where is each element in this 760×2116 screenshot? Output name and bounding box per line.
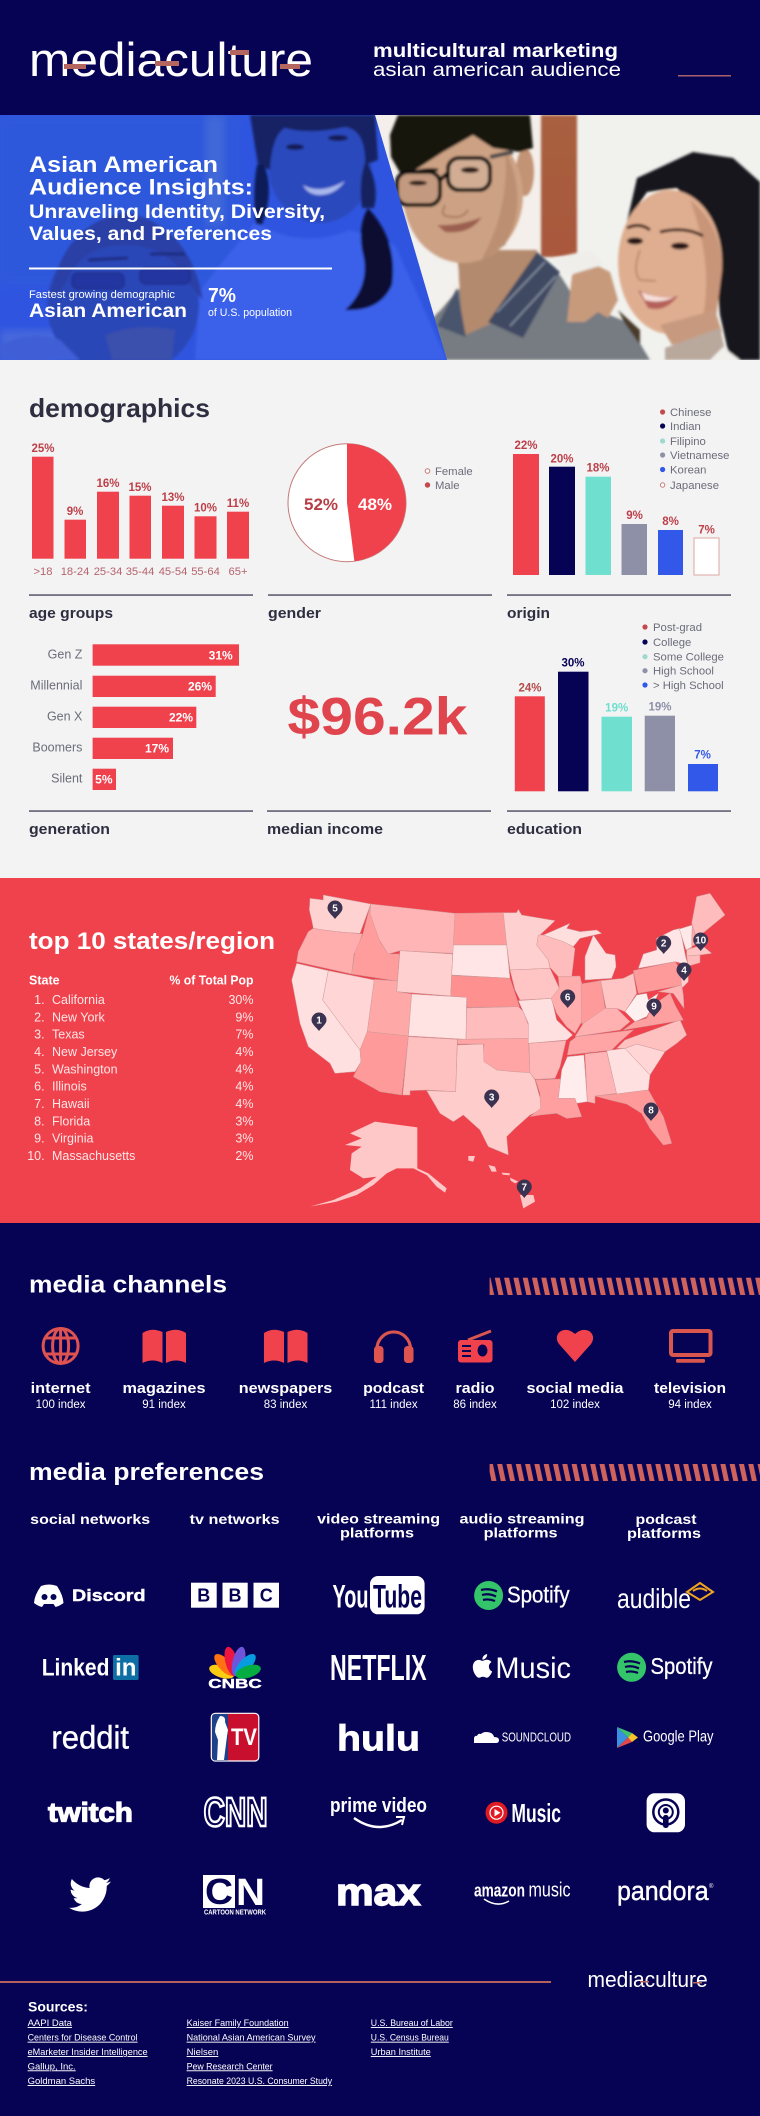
hero stat: fastest growing demographic (29, 289, 187, 322)
table: states ranking: State (29, 974, 60, 988)
heading: media preferences: media preferences (29, 1459, 264, 1486)
logo: CNN: CNN (204, 1789, 268, 1835)
heading: media channels: media channels (29, 1272, 227, 1299)
chart: origin (513, 407, 729, 575)
pin 5 Washington (328, 901, 342, 919)
chart: education: 7% (694, 750, 711, 762)
icon: television (671, 1331, 710, 1363)
table: states ranking: 10. (27, 1149, 45, 1163)
table: states ranking: 9. (34, 1132, 45, 1146)
chart: generation: 22% (169, 710, 193, 724)
chart: generation: Gen Z (48, 648, 83, 662)
logo: max: max (336, 1872, 421, 1914)
sources: Sources: (28, 1999, 88, 2015)
pin 10 Massachusetts (693, 933, 708, 951)
logo: CNBC (207, 1645, 263, 1691)
logo: footer mediaculture: mediaculture (588, 1967, 708, 1992)
icon: magazines book (142, 1330, 186, 1363)
table: states ranking: 4% (235, 1097, 254, 1111)
hero headline: Audience Insights: (29, 174, 253, 200)
column headers: media preferences: podcast (636, 1512, 697, 1527)
sources: Kaiser Family Foundation (187, 2018, 289, 2029)
chart: gender pie: 48% (358, 495, 392, 514)
chart: origin: 18% (586, 463, 610, 475)
channel: radio: radio (456, 1381, 495, 1397)
panel: media channels (0, 1223, 760, 2116)
legend: education (642, 622, 724, 692)
sources: AAPI Data (28, 2018, 73, 2029)
sources: Pew Research Center (187, 2061, 273, 2072)
sources: U.S. Census Bureau (371, 2033, 449, 2044)
chart: age groups: 65+ (229, 566, 247, 578)
logo: spotify audio: Spotify (507, 1582, 570, 1608)
column headers: media preferences: tv networks (190, 1512, 280, 1527)
legend: origin: Indian (670, 421, 701, 433)
legend: education: High School (653, 666, 714, 678)
pin 10 Massachusetts: 10 (695, 936, 707, 946)
table: states ranking: Florida (52, 1114, 90, 1128)
table: states ranking: Massachusetts (52, 1149, 135, 1163)
sources: eMarketer Insider Intelligence (28, 2047, 148, 2058)
column headers: media preferences: platforms (340, 1525, 414, 1540)
chart: origin: 20% (550, 454, 574, 466)
channel: television (654, 1381, 726, 1411)
sources: U.S. Bureau of Labor (371, 2018, 453, 2029)
logo: LinkedIn: in (115, 1654, 136, 1682)
column headers: media preferences: platforms (484, 1526, 558, 1541)
column headers: media preferences: social networks (30, 1512, 150, 1527)
table: states ranking: Virginia (52, 1132, 94, 1146)
logo: YouTube Music (486, 1798, 561, 1828)
chart: generation: Millennial (30, 678, 82, 692)
sources (28, 1999, 453, 2087)
logo: SoundCloud: SOUNDCLOUD (502, 1730, 571, 1745)
pin 6 Illinois: 6 (565, 992, 571, 1004)
channel: magazines (122, 1381, 206, 1411)
table: states ranking: % of Total Pop (170, 974, 254, 988)
legend: education: > High School (653, 680, 724, 692)
channel: podcast: 111 index (370, 1399, 418, 1411)
pin 8 Florida (644, 1103, 658, 1121)
logo: Twitter (69, 1877, 111, 1912)
chart: age groups: 55-64 (191, 566, 220, 578)
logo: reddit: reddit (51, 1719, 129, 1755)
hero stat: 7% of U.S. population (208, 285, 292, 319)
stat: median income: $96.2k (288, 688, 468, 746)
logo: YouTube: You (332, 1579, 368, 1615)
channel: magazines: magazines (122, 1381, 206, 1397)
table: states ranking: 1. (34, 993, 45, 1007)
chart: origin: 7% (698, 524, 715, 536)
logo: hulu: hulu (337, 1718, 420, 1759)
table: states ranking: 2. (34, 1010, 45, 1024)
chart: gender pie (288, 444, 473, 562)
logo: Cartoon Network: CARTOON NETWORK (204, 1910, 266, 1916)
table: states ranking: 4% (235, 1080, 254, 1094)
logo: prime video: prime video (330, 1795, 427, 1817)
label: median income: median income (267, 821, 383, 838)
logo: YouTube: Tube (373, 1579, 422, 1615)
chart: age groups (31, 443, 249, 578)
channel: internet: 100 index (36, 1399, 86, 1411)
icon: podcast headphones (374, 1332, 414, 1363)
table: states ranking: Texas (52, 1028, 85, 1042)
channel: newspapers: newspapers (239, 1381, 332, 1397)
label: age groups: age groups (29, 605, 113, 622)
chart: age groups: 16% (96, 478, 120, 490)
legend: gender: Male (435, 480, 460, 492)
pin 4 New Jersey: 4 (681, 966, 687, 976)
table: states ranking: 4% (235, 1062, 254, 1076)
chart: generation: Silent (51, 772, 83, 786)
legend: origin: Japanese (670, 480, 719, 492)
table: states ranking: Washington (52, 1062, 118, 1076)
logo: BBC: B (228, 1586, 242, 1606)
hero stat: 7% of U.S. population: 7% (208, 285, 236, 307)
chart: education (515, 622, 724, 791)
table: states ranking: 4% (235, 1045, 254, 1059)
chart: age groups: 13% (161, 492, 185, 504)
hero headline: Values, and Preferences (29, 223, 272, 245)
column headers: media preferences: platforms (627, 1526, 701, 1541)
channel: television: television (654, 1381, 726, 1397)
legend: origin: Filipino (670, 436, 706, 448)
logo: pandora: ® (709, 1883, 714, 1890)
footer line (0, 1981, 551, 1983)
chart: age groups: 25% (31, 443, 55, 455)
legend: origin: Chinese (670, 407, 711, 419)
logo: YouTube Music: Music (511, 1798, 561, 1828)
logo: prime video (330, 1795, 427, 1827)
pin 3 Texas: 3 (489, 1092, 495, 1104)
legend: gender: Female (435, 466, 473, 478)
pin 8 Florida: 8 (648, 1106, 654, 1116)
logo: pandora: pandora (617, 1876, 710, 1906)
hero stat: 7% of U.S. population: of U.S. population (208, 307, 292, 319)
chart: origin: 8% (662, 516, 679, 528)
chart: education: 24% (518, 683, 542, 695)
table: states ranking: 7. (34, 1097, 45, 1111)
panel: demographics (0, 360, 760, 878)
chart: origin: 9% (626, 510, 643, 522)
sources: Centers for Disease Control (28, 2033, 138, 2044)
hero stat: fastest growing demographic: Fastest growing demographic (29, 289, 176, 301)
channel: newspapers (239, 1381, 332, 1411)
channel: newspapers: 83 index (264, 1399, 307, 1411)
pin 7 Hawaii: 7 (522, 1182, 528, 1194)
table: states ranking: California (52, 993, 105, 1007)
pin 7 Hawaii (517, 1180, 532, 1198)
logo: Cartoon Network (203, 1871, 266, 1916)
logo: NBA TV: TV (231, 1724, 257, 1751)
chart: generation: Gen X (47, 710, 83, 724)
logo: Google Play: Google Play (643, 1729, 714, 1746)
header title (373, 40, 621, 81)
chart: education: 19% (648, 701, 672, 713)
hero blue panel (0, 107, 447, 377)
table: states ranking: 5. (34, 1062, 45, 1076)
chart: education: 19% (605, 702, 628, 714)
pin 1 California: 1 (316, 1016, 322, 1026)
pin 2 New York (656, 936, 671, 954)
duotone photo: girl and grandfather (0, 107, 447, 377)
channel: television: 94 index (668, 1399, 712, 1411)
hero headline (29, 152, 325, 245)
logo: SoundCloud (474, 1730, 571, 1745)
chart: generation: 5% (95, 772, 113, 786)
table: states ranking: Illinois (52, 1080, 87, 1094)
chart: age groups: 9% (67, 506, 83, 518)
table: states ranking: New York (52, 1010, 106, 1024)
header title: multicultural marketing (373, 40, 618, 62)
sources: Urban Institute (371, 2047, 431, 2058)
panel: top 10 states (0, 878, 760, 1223)
logo: twitch: twitch (48, 1798, 133, 1828)
table: states ranking: 2% (235, 1149, 254, 1163)
pin 6 Illinois (560, 990, 575, 1008)
logo: BBC (191, 1583, 279, 1608)
legend: education: Post-grad (653, 622, 702, 634)
header title: asian american audience (373, 59, 621, 81)
chart: generation: 26% (188, 680, 212, 694)
pin 5 Washington: 5 (332, 904, 338, 914)
channel: podcast: podcast (363, 1381, 424, 1397)
logo: discord (34, 1584, 146, 1607)
pin 4 New Jersey (676, 963, 692, 981)
chart: generation: Boomers (32, 740, 82, 754)
channel: podcast (363, 1381, 424, 1411)
label: generation: generation (29, 821, 110, 838)
chart: age groups: 25-34 (94, 566, 122, 578)
logo: amazon music: amazon (474, 1880, 525, 1900)
legend: origin (660, 407, 729, 492)
chart: age groups: 15% (128, 482, 152, 494)
logo: BBC: B (197, 1586, 210, 1606)
heading: top 10 states/region: top 10 states/region (29, 928, 275, 955)
hero photo: man and woman (360, 115, 760, 360)
logo: amazon music (474, 1879, 570, 1904)
logo: spotify audio (474, 1581, 570, 1610)
logo: CNBC: CNBC (208, 1677, 262, 1691)
logo: BBC: C (260, 1586, 273, 1606)
sources: Gallup, Inc. (28, 2061, 76, 2072)
logo: Apple Podcasts (647, 1793, 685, 1832)
icon: social media heart (557, 1330, 593, 1362)
chart: age groups: 11% (227, 498, 249, 510)
channel: radio: 86 index (453, 1399, 497, 1411)
chart: age groups: >18 (34, 566, 52, 578)
column headers: media preferences: audio streaming (460, 1512, 584, 1527)
chart: origin: 22% (514, 440, 538, 452)
logo: NETFLIX: NETFLIX (330, 1647, 427, 1688)
column headers: media preferences: video streaming (317, 1511, 440, 1526)
sources: Nielsen (187, 2047, 218, 2058)
table: states ranking: 8. (34, 1114, 45, 1128)
icon: internet globe (43, 1328, 78, 1364)
channel: internet: internet (31, 1381, 91, 1397)
channel: radio (453, 1381, 497, 1411)
legend: education: Some College (653, 652, 724, 664)
label: education: education (507, 821, 582, 838)
logo: YouTube (332, 1576, 425, 1615)
channel: social media: 102 index (550, 1399, 600, 1411)
chart: age groups: 18-24 (61, 566, 89, 578)
legend: gender (425, 466, 473, 492)
sources: Goldman Sachs (28, 2076, 95, 2087)
column headers: media preferences (30, 1511, 701, 1541)
logo: spotify podcast: Spotify (650, 1653, 713, 1679)
pin 9 Virginia: 9 (651, 1002, 657, 1012)
logo: Apple Music: Music (495, 1652, 571, 1685)
logo: audible: audible (617, 1583, 691, 1614)
chart: generation: 31% (209, 648, 233, 662)
legend: origin: Vietnamese (670, 450, 729, 462)
chart: age groups: 45-54 (159, 566, 187, 578)
logo: discord: Discord (72, 1586, 146, 1605)
chart: generation (30, 644, 239, 790)
table: states ranking: Hawaii (52, 1097, 90, 1111)
table: states ranking: 6. (34, 1080, 45, 1094)
chart: generation: 17% (145, 742, 169, 756)
table: states ranking: 3. (34, 1028, 45, 1042)
table: states ranking: 9% (235, 1010, 254, 1024)
header band (0, 0, 760, 115)
table: states ranking: 3% (235, 1132, 254, 1146)
chart: education: 30% (561, 658, 585, 670)
heading: demographics: demographics (29, 393, 210, 423)
map pins (312, 901, 708, 1198)
chart: age groups: 10% (194, 502, 217, 514)
table: states ranking: 7% (235, 1028, 254, 1042)
icon: newspapers book (264, 1330, 308, 1363)
channel: magazines: 91 index (142, 1399, 186, 1411)
channel: social media: social media (526, 1381, 625, 1397)
pin 2 New York: 2 (661, 938, 667, 950)
legend: education: College (653, 637, 691, 649)
table: states ranking: 30% (228, 993, 254, 1007)
channel: social media (526, 1381, 625, 1411)
logo: Google Play (617, 1727, 714, 1748)
chart: gender pie: 52% (304, 495, 338, 514)
sources: National Asian American Survey (187, 2033, 316, 2044)
pin 3 Texas (484, 1090, 499, 1108)
logo: LinkedIn: Linked (42, 1655, 110, 1682)
channel: internet (31, 1381, 91, 1411)
logo: amazon music: music (528, 1879, 570, 1901)
hero headline: Asian American (29, 152, 218, 177)
map: united states (292, 893, 725, 1208)
logo: mediaculture: mediaculture (29, 33, 313, 86)
pin 9 Virginia (646, 999, 662, 1017)
logo: spotify podcast (617, 1653, 713, 1682)
label: gender: gender (268, 605, 321, 622)
hero headline: Unraveling Identity, Diversity, (29, 201, 325, 223)
table: states ranking: 4. (34, 1045, 45, 1059)
sources: Resonate 2023 U.S. Consumer Study (187, 2076, 332, 2087)
table: states ranking (27, 974, 254, 1163)
logo: Cartoon Network: N (236, 1872, 265, 1914)
logo: Cartoon Network: C (205, 1871, 233, 1912)
table: states ranking: New Jersey (52, 1045, 118, 1059)
pin 1 California (312, 1012, 326, 1031)
label: origin: origin (507, 605, 550, 622)
hero stat: fastest growing demographic: Asian American (29, 300, 187, 322)
chart: age groups: 35-44 (126, 566, 154, 578)
icon: radio (458, 1331, 492, 1362)
legend: origin: Korean (670, 464, 706, 476)
table: states ranking: 3% (235, 1114, 254, 1128)
logo: NBA TV (211, 1713, 259, 1761)
